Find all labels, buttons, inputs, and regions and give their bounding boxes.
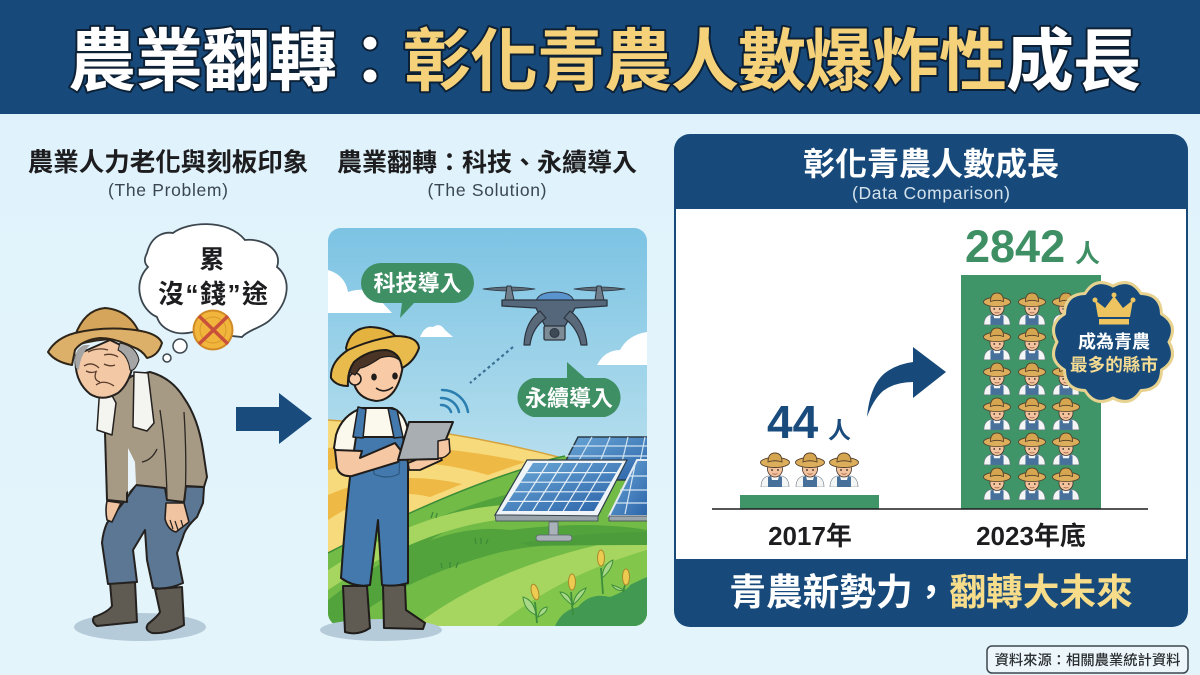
- yellow field: [328, 420, 570, 560]
- source note: 資料來源：相關農業統計資料: [995, 651, 1180, 669]
- solution heading: 農業翻轉：科技、永續導入: [337, 149, 637, 177]
- arrow: problem to solution: [236, 393, 312, 444]
- problem heading: 農業人力老化與刻板印象: [28, 149, 308, 177]
- grass tufts: [431, 512, 488, 568]
- callout: sustainability: 永續導入: [525, 386, 613, 411]
- clouds: [328, 270, 647, 365]
- problem subheading: (The Problem): [108, 180, 228, 200]
- callout: sustainability: [517, 362, 621, 417]
- head: [76, 340, 135, 398]
- green hill: [328, 456, 647, 626]
- young farmer illustration: [320, 327, 453, 641]
- badge text: 成為青農: [1078, 331, 1150, 352]
- boots: [343, 586, 370, 633]
- value: 44 people: 44: [767, 396, 819, 448]
- arrow: growth: [867, 347, 946, 417]
- title banner: [0, 0, 1200, 114]
- old farmer illustration: [48, 308, 207, 641]
- axis: [712, 508, 1148, 510]
- towel: [97, 372, 154, 435]
- signal dotted line: [470, 347, 513, 383]
- value: 2842 people: 2842: [965, 221, 1065, 272]
- bar chart: [712, 221, 1148, 551]
- farmers: 2017: [760, 453, 858, 487]
- label: 2023: 2023年底: [976, 521, 1086, 551]
- thought cloud: [139, 224, 287, 362]
- unit: 2842 people: 人: [1075, 240, 1100, 268]
- icon: crossed coin: [194, 310, 232, 350]
- thought text: 累: [199, 246, 225, 274]
- boots: [93, 582, 137, 626]
- panel: the problem: [28, 149, 308, 641]
- left hand: [106, 501, 121, 522]
- shirt: [334, 408, 408, 475]
- straw hat: [75, 308, 140, 345]
- overalls: [341, 437, 408, 586]
- unit: 44 people: 人: [828, 417, 851, 443]
- label: 2017: 2017年: [768, 521, 852, 551]
- bar: 2017: [740, 495, 879, 509]
- data heading: 彰化青農人數成長: [803, 146, 1059, 182]
- bar: 2023: [961, 275, 1101, 509]
- icon: crown: [1092, 292, 1136, 324]
- head: [353, 350, 403, 401]
- panel: the solution: [320, 149, 651, 641]
- solution subheading: (The Solution): [428, 180, 546, 200]
- solar panels: [495, 437, 651, 541]
- tablet: [398, 422, 453, 460]
- arms: [335, 443, 402, 476]
- thought text line two: 沒“錢”途: [158, 279, 268, 309]
- corn plants and bush: [523, 550, 647, 626]
- badge: most young farmers: [1054, 283, 1172, 401]
- title: 農業翻轉：彰化青農人數爆炸性成長: [68, 24, 1140, 100]
- torso and sleeves: [105, 372, 207, 502]
- panel: data comparison: [674, 134, 1188, 627]
- trousers: [102, 485, 204, 588]
- callout: technology: [361, 263, 474, 318]
- farmers: 2023: [983, 293, 1080, 500]
- icon: wifi signal: [441, 390, 468, 412]
- source note: [987, 646, 1188, 673]
- callout: technology: 科技導入: [373, 271, 462, 296]
- badge text gold: 最多的縣市: [1070, 355, 1158, 375]
- chart area: [676, 209, 1186, 559]
- right hand: [165, 503, 189, 532]
- data subheading: (Data Comparison): [852, 183, 1010, 203]
- hat: [346, 327, 398, 362]
- slogan: 青農新勢力，翻轉大未來: [729, 572, 1133, 613]
- farm scene: [328, 228, 651, 626]
- icon: drone: [483, 286, 625, 345]
